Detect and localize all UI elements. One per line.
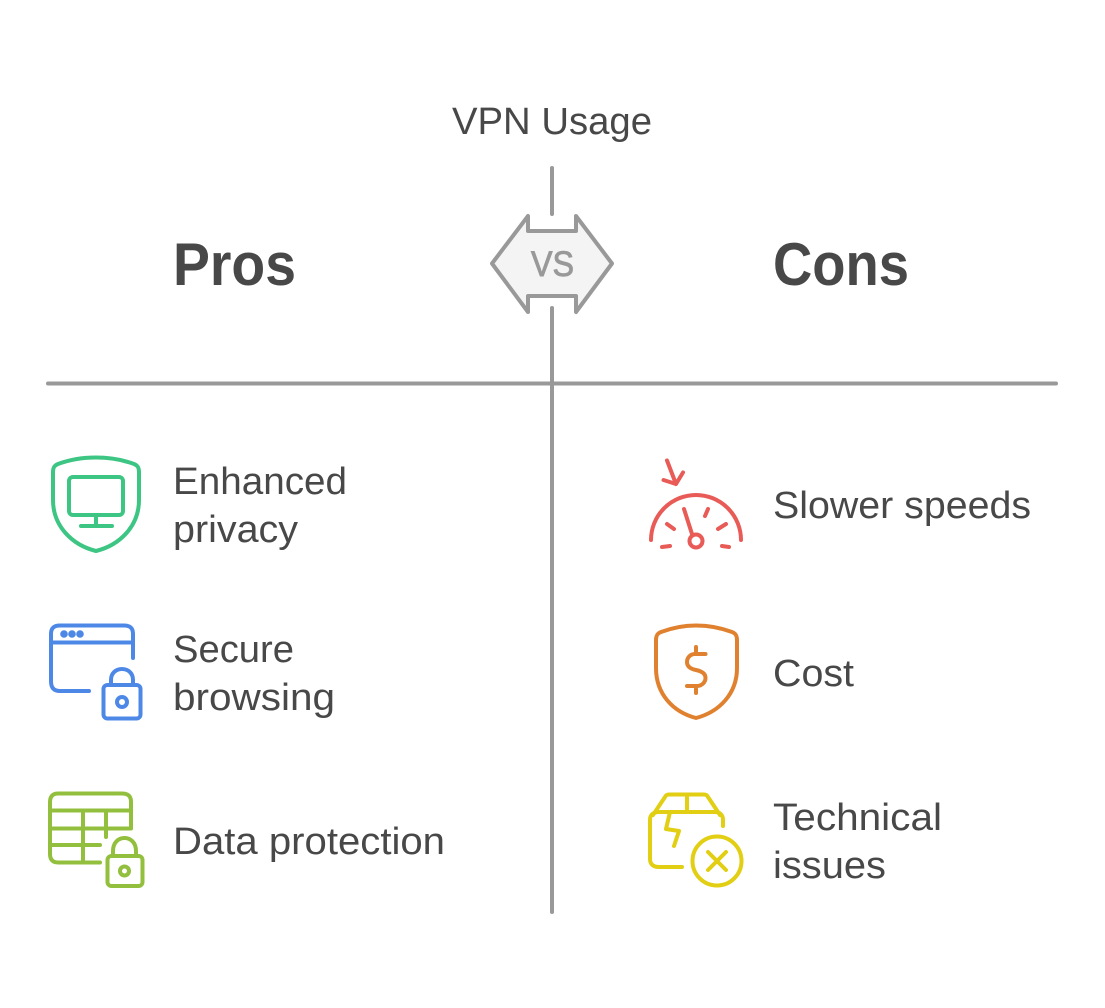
label: technical issues: issues [773, 845, 886, 887]
icon: table with lock [50, 794, 142, 886]
item: technical issues [650, 794, 942, 887]
heading: pros: Pros [173, 231, 296, 298]
panel: pros [50, 458, 445, 886]
item: slower speeds [651, 460, 1031, 548]
icon: browser with lock [51, 626, 140, 718]
label: secure browsing [173, 629, 335, 719]
label: data protection: Data protection [173, 821, 445, 863]
label: cost: Cost [773, 653, 854, 695]
label: technical issues [773, 797, 942, 887]
label: enhanced privacy: Enhanced [173, 461, 347, 503]
vs badge: VS [531, 245, 574, 284]
item: enhanced privacy [53, 458, 347, 551]
item: secure browsing [51, 626, 335, 719]
label: slower speeds: Slower speeds [773, 485, 1031, 527]
icon: shield with monitor [53, 458, 139, 551]
icon: shield with dollar [656, 626, 737, 718]
label: enhanced privacy [173, 461, 347, 551]
icon: damaged box with x [650, 794, 742, 886]
title: VPN Usage [452, 101, 652, 143]
item: data protection [50, 794, 445, 886]
vs badge [492, 216, 612, 312]
label: technical issues: Technical [773, 797, 942, 839]
label: secure browsing: browsing [173, 677, 335, 719]
heading: cons: Cons [773, 231, 909, 298]
label: secure browsing: Secure [173, 629, 294, 671]
icon: speedometer [651, 460, 741, 548]
label: enhanced privacy: privacy [173, 509, 298, 551]
panel: cons [650, 460, 1031, 887]
item: cost [656, 626, 854, 718]
